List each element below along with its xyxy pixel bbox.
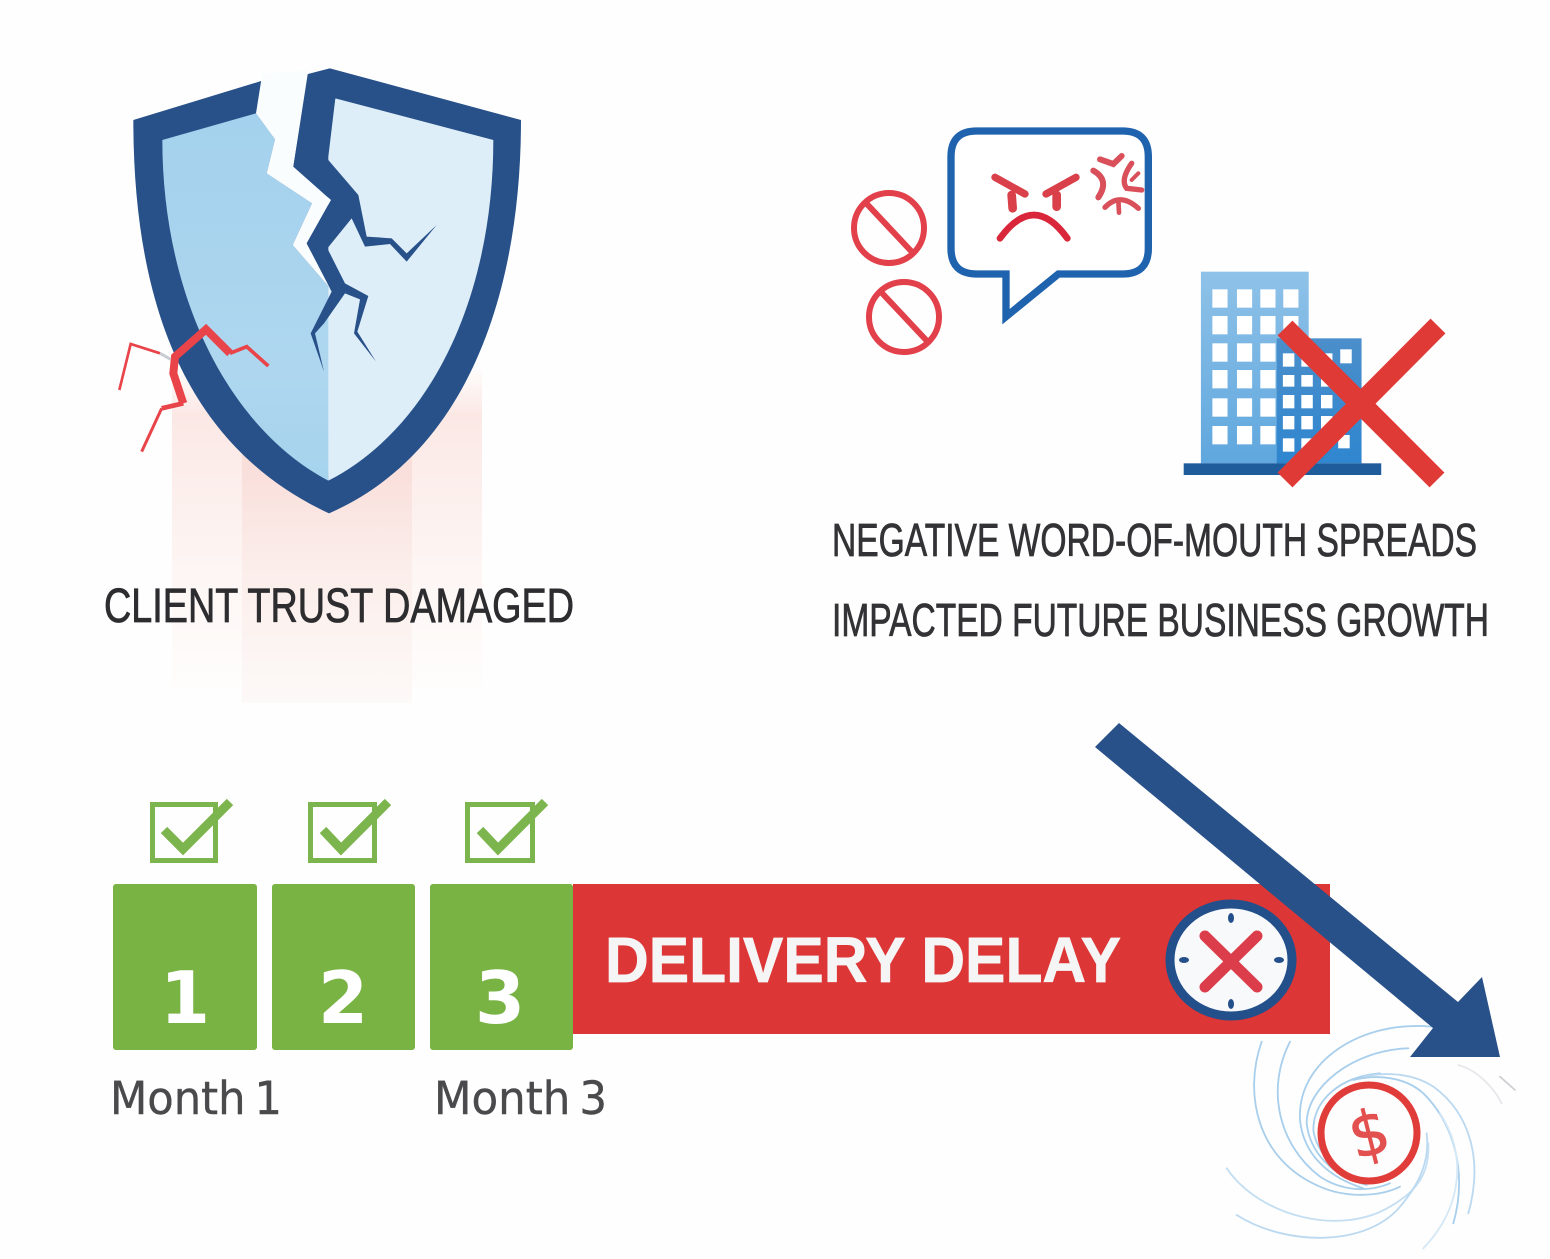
icon: cracked shield (133, 68, 521, 513)
panel: client trust damaged (104, 68, 574, 703)
month 1 block (113, 884, 257, 1050)
month 2 block: 2 (318, 956, 368, 1040)
panel: delivery timeline (110, 802, 1330, 1125)
month 3 block (430, 884, 573, 1050)
icon: checkbox 3 (468, 802, 545, 860)
icon: dollar coin (1321, 1085, 1417, 1181)
icon: prohibition sign top (854, 193, 924, 263)
icon: red cross over buildings (1285, 326, 1438, 480)
icon: checkbox 2 (310, 802, 388, 860)
label: delivery delay: DELIVERY DELAY (605, 924, 1121, 996)
arrow: downward trend (1095, 723, 1500, 1057)
delivery delay bar (573, 884, 1330, 1034)
icon: red crack on shield edge (119, 329, 268, 452)
pink fading bands behind shield (172, 370, 482, 703)
label: month 1: Month 1 (110, 1072, 282, 1125)
icon: angry speech bubble (951, 131, 1148, 317)
label: month 3: Month 3 (434, 1072, 607, 1125)
icon: dollar coin: $ (1341, 1093, 1397, 1174)
icon: office buildings (1184, 272, 1381, 475)
icon: clock with cross (1170, 904, 1292, 1016)
panel: word of mouth and growth (832, 131, 1489, 646)
icon: checkbox 1 (152, 802, 230, 860)
month 1 block: 1 (160, 956, 210, 1040)
month 3 block: 3 (475, 956, 525, 1040)
swirl lines around coin (1227, 1026, 1515, 1248)
panel: revenue drain (1095, 723, 1515, 1248)
icon: prohibition sign bottom (869, 282, 939, 352)
month 2 block (272, 884, 415, 1050)
heading: client trust damaged: CLIENT TRUST DAMAGED (104, 580, 574, 633)
